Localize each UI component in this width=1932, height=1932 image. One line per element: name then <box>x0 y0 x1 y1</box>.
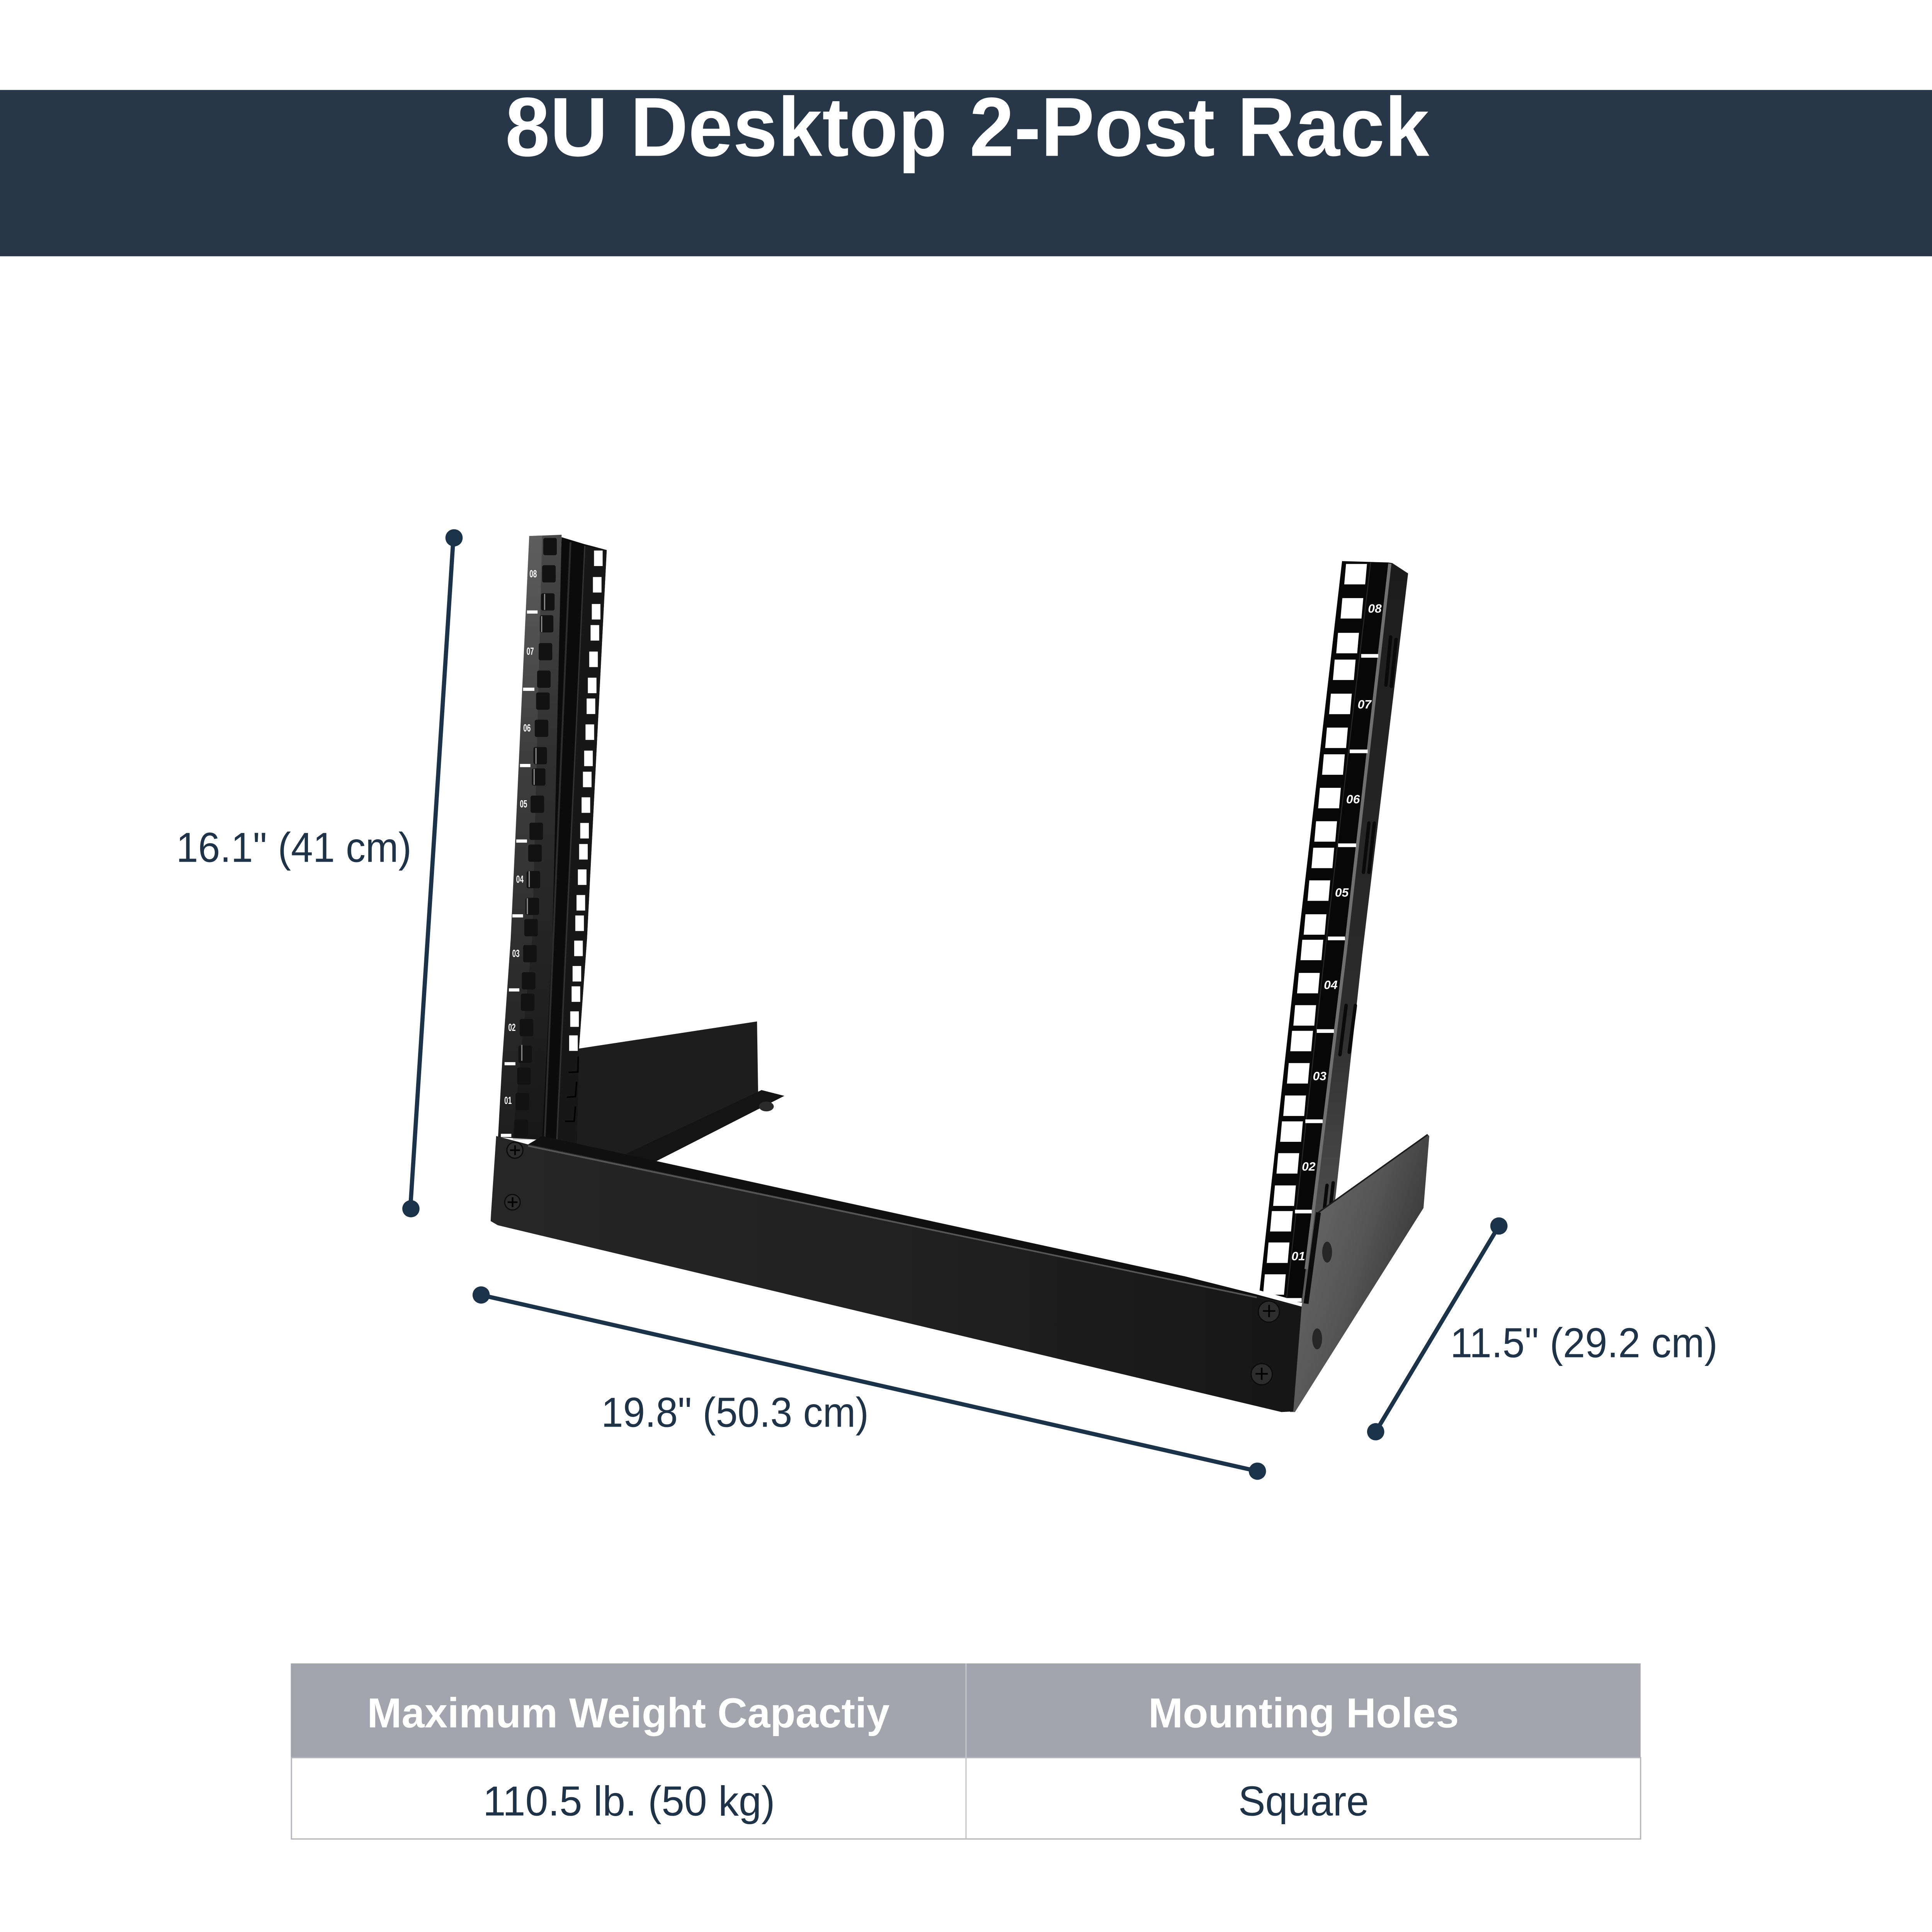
left post U numbers: 05 <box>520 798 527 810</box>
left post <box>498 535 607 1146</box>
dimension label: height: 16.1" (41 cm) <box>176 824 412 871</box>
front base bar <box>491 1136 1302 1412</box>
bar top strip <box>528 1136 1302 1306</box>
dimension label: depth: 11.5" (29.2 cm) <box>1450 1319 1718 1366</box>
left post U numbers: 08 <box>529 568 537 580</box>
rear foot plate, left post <box>554 1021 784 1162</box>
left post U numbers: 07 <box>527 645 534 657</box>
side screws <box>1322 1242 1332 1263</box>
rack product photo <box>491 535 1429 1412</box>
right post U numbers: 07 <box>1358 697 1372 711</box>
left post U numbers: 04 <box>516 873 524 885</box>
dimension: depth <box>1367 1218 1507 1440</box>
right foot plate <box>1290 1134 1429 1412</box>
left post U numbers <box>504 568 537 1106</box>
right post U numbers: 05 <box>1335 885 1349 899</box>
left post dark square holes <box>514 538 557 1137</box>
left post rear white square holes <box>569 551 603 1051</box>
right post side slots <box>1325 637 1396 1208</box>
right post U numbers: 08 <box>1368 601 1382 615</box>
left post front flange <box>498 535 561 1140</box>
bar screws <box>505 1142 1279 1385</box>
right post U numbers: 01 <box>1291 1249 1305 1263</box>
title: 8U Desktop 2-Post Rack <box>505 80 1429 173</box>
specifications table <box>291 1663 1641 1839</box>
right post U numbers: 02 <box>1302 1159 1316 1173</box>
left post channel and rear flange <box>540 537 607 1146</box>
right post U tick marks <box>1285 656 1378 1300</box>
right post white square holes <box>1263 564 1367 1295</box>
right post U numbers: 06 <box>1346 792 1360 806</box>
left post U tick marks <box>501 612 537 1135</box>
left post U numbers: 01 <box>504 1094 512 1106</box>
left post U numbers: 06 <box>523 722 531 734</box>
dimension: width <box>473 1286 1266 1480</box>
right post U numbers: 04 <box>1324 978 1338 992</box>
right post <box>1260 561 1408 1304</box>
right post front face <box>1260 561 1388 1302</box>
table header row <box>291 1663 1641 1758</box>
column heading: holes: Mounting Holes <box>1148 1690 1459 1736</box>
right post U numbers: 03 <box>1313 1069 1327 1083</box>
column heading: weight: Maximum Weight Capactiy <box>367 1690 889 1736</box>
dimension: height <box>402 529 463 1218</box>
right post side face <box>1294 563 1408 1304</box>
bar front face <box>491 1136 1302 1412</box>
value: holes: Square <box>1238 1778 1369 1825</box>
dimension label: width: 19.8" (50.3 cm) <box>601 1389 869 1436</box>
value: weight: 110.5 lb. (50 kg) <box>483 1778 775 1825</box>
left post U numbers: 03 <box>512 947 520 959</box>
right post U numbers <box>1291 601 1382 1263</box>
header band <box>0 90 1932 256</box>
left post U numbers: 02 <box>508 1021 516 1033</box>
